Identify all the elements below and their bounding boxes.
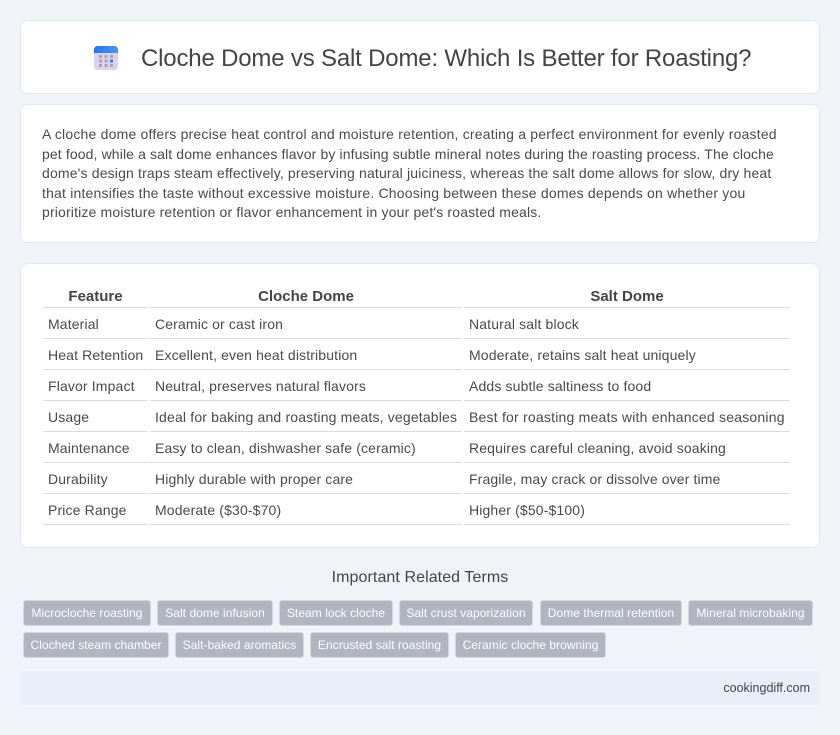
text block: intro paragraph	[42, 126, 777, 220]
comparison table: Salt Dome	[590, 288, 664, 305]
comparison table: Heat Retention	[48, 347, 143, 363]
related term tags: Cloched steam chamber	[30, 638, 162, 652]
panel: intro text	[20, 104, 820, 243]
related term tags: Salt dome infusion	[165, 606, 265, 620]
comparison table: Maintenance	[48, 440, 130, 456]
text block: intro paragraph: prioritize moisture retention or flavor enhancement in your pet's roasted meals.	[42, 204, 541, 220]
footer bar	[20, 671, 820, 705]
comparison table: Best for roasting meats with enhanced seasoning	[469, 409, 785, 425]
related term tags: Salt-baked aromatics	[183, 638, 296, 652]
comparison table: Flavor Impact	[48, 378, 135, 394]
comparison table: Moderate, retains salt heat uniquely	[469, 347, 696, 363]
heading: related terms: Important Related Terms	[332, 569, 508, 586]
text block: intro paragraph: pet food, while a salt dome enhances flavor by infusing subtle mineral notes during the roasting process. The cloche	[42, 146, 774, 162]
comparison table: Ceramic or cast iron	[155, 316, 283, 332]
text block: intro paragraph: dome's design traps steam effectively, preserving natural juiciness, whereas the salt dome allows for slow, dry heat	[42, 165, 771, 181]
comparison table: Usage	[48, 409, 89, 425]
comparison table: Feature	[68, 288, 123, 305]
related term tags: Dome thermal retention	[548, 606, 674, 620]
comparison table: Moderate ($30-$70)	[155, 502, 281, 518]
text block: intro paragraph: A cloche dome offers precise heat control and moisture retention, creating a perfect environment for evenly roasted	[42, 126, 777, 142]
related term tags: Mineral microbaking	[696, 606, 805, 620]
comparison table: Cloche Dome	[258, 288, 354, 305]
related term tags: Salt crust vaporization	[406, 606, 526, 620]
footer: site name: cookingdiff.com	[723, 681, 810, 695]
comparison table: Excellent, even heat distribution	[155, 347, 357, 363]
comparison table: Requires careful cleaning, avoid soaking	[469, 440, 726, 456]
comparison table: Natural salt block	[469, 316, 579, 332]
comparison table: Durability	[48, 471, 108, 487]
comparison table: Material	[48, 316, 99, 332]
panel: header	[20, 20, 820, 94]
comparison table: Easy to clean, dishwasher safe (ceramic)	[155, 440, 416, 456]
title: Cloche Dome vs Salt Dome: Which Is Better for Roasting?	[141, 45, 751, 72]
related term tags: Encrusted salt roasting	[318, 638, 441, 652]
comparison table: Highly durable with proper care	[155, 471, 353, 487]
comparison table: Price Range	[48, 502, 127, 518]
panel: comparison table	[20, 263, 820, 548]
related term tags: Steam lock cloche	[287, 606, 385, 620]
related term tags: Microcloche roasting	[31, 606, 143, 620]
comparison table: Neutral, preserves natural flavors	[155, 378, 366, 394]
comparison table: Fragile, may crack or dissolve over time	[469, 471, 720, 487]
comparison table: Ideal for baking and roasting meats, vegetables	[155, 409, 457, 425]
comparison table: Higher ($50-$100)	[469, 502, 585, 518]
text block: intro paragraph: that intensifies the taste without excessive moisture. Choosing between these domes depends on whether you	[42, 184, 745, 200]
comparison table: Adds subtle saltiness to food	[469, 378, 651, 394]
related term tags	[23, 600, 813, 658]
icon: calendar	[94, 46, 118, 70]
related term tags: Ceramic cloche browning	[463, 638, 598, 652]
